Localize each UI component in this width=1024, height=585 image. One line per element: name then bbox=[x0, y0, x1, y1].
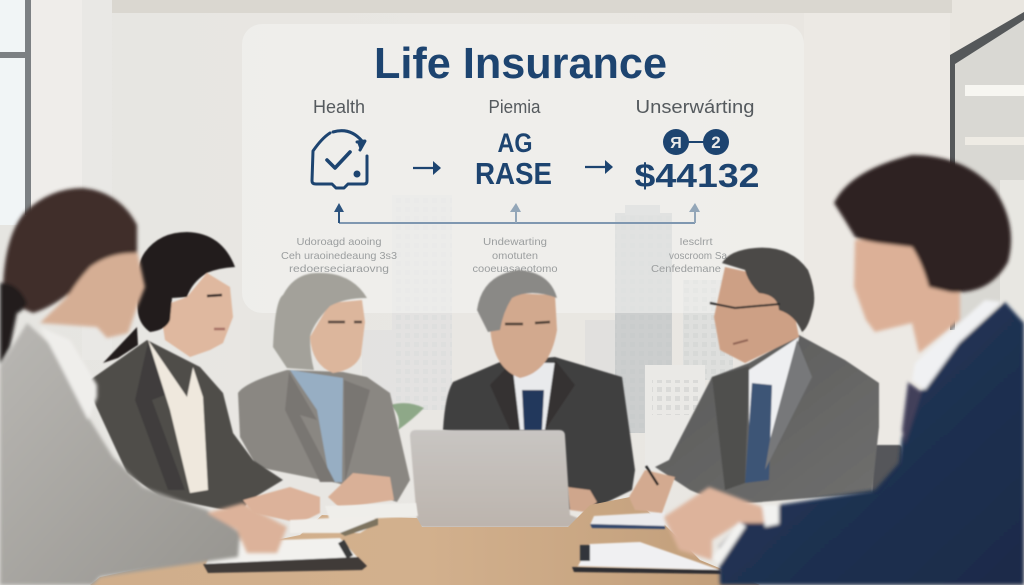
icon: health check bbox=[312, 131, 367, 188]
heading: health: Health bbox=[313, 97, 365, 117]
clipboard: front-right bbox=[572, 542, 722, 574]
title: Life Insurance bbox=[374, 39, 667, 88]
text block: premia note: cooeuasaeotomo bbox=[472, 263, 558, 275]
text block: health note: Ceh uraoinedeaung 3s3 bbox=[281, 250, 397, 262]
background city skyline bbox=[250, 195, 733, 470]
text block: health note: Udoroagd aooing bbox=[296, 236, 382, 248]
text block: underwriting note: Cenfedemane bbox=[651, 263, 721, 275]
icon: numbered steps: 2 bbox=[711, 133, 721, 152]
person: front-left woman bbox=[0, 188, 287, 585]
text block: premia note bbox=[472, 236, 558, 275]
person: man with glasses bbox=[629, 248, 879, 513]
heading: underwriting: Unserwárting bbox=[636, 97, 754, 117]
text block: underwriting note: Iesclrrt bbox=[680, 236, 713, 248]
panel: life insurance overview bbox=[242, 24, 804, 313]
documents: centre-left bbox=[290, 503, 418, 536]
person: centre man bbox=[443, 270, 635, 512]
text block: underwriting note: voscroom Sa bbox=[669, 250, 727, 262]
glass door: right bbox=[950, 12, 1024, 330]
figure: AG RASE: AG bbox=[498, 128, 532, 158]
arrow: premia to underwriting bbox=[585, 160, 613, 174]
clipboard: front-left bbox=[203, 538, 367, 573]
text block: underwriting note bbox=[651, 236, 727, 275]
chair: behind man bbox=[872, 445, 902, 495]
arrow: health to premia bbox=[413, 161, 441, 175]
heading: premia: Piemia bbox=[488, 97, 541, 117]
table bbox=[90, 497, 760, 585]
plant bbox=[390, 403, 424, 430]
window: left bbox=[0, 0, 31, 225]
person: woman in dark jacket bbox=[90, 232, 320, 523]
text block: health note bbox=[281, 236, 397, 275]
figure: dollar amount: $44132 bbox=[634, 157, 760, 194]
feedback arrows bbox=[334, 203, 700, 223]
figure: AG RASE bbox=[475, 128, 552, 191]
icon: numbered steps bbox=[663, 129, 729, 155]
person: grey-haired woman bbox=[238, 273, 410, 508]
laptop bbox=[410, 430, 583, 527]
text block: premia note: Undewarting bbox=[483, 236, 547, 248]
icon: numbered steps: Я bbox=[670, 135, 682, 152]
figure: AG RASE: RASE bbox=[475, 156, 552, 191]
text block: health note: redoerseciaraovng bbox=[289, 263, 389, 275]
person: front-right man bbox=[664, 155, 1024, 585]
text block: premia note: omotuten bbox=[492, 250, 538, 262]
documents: right notebook bbox=[590, 512, 665, 529]
